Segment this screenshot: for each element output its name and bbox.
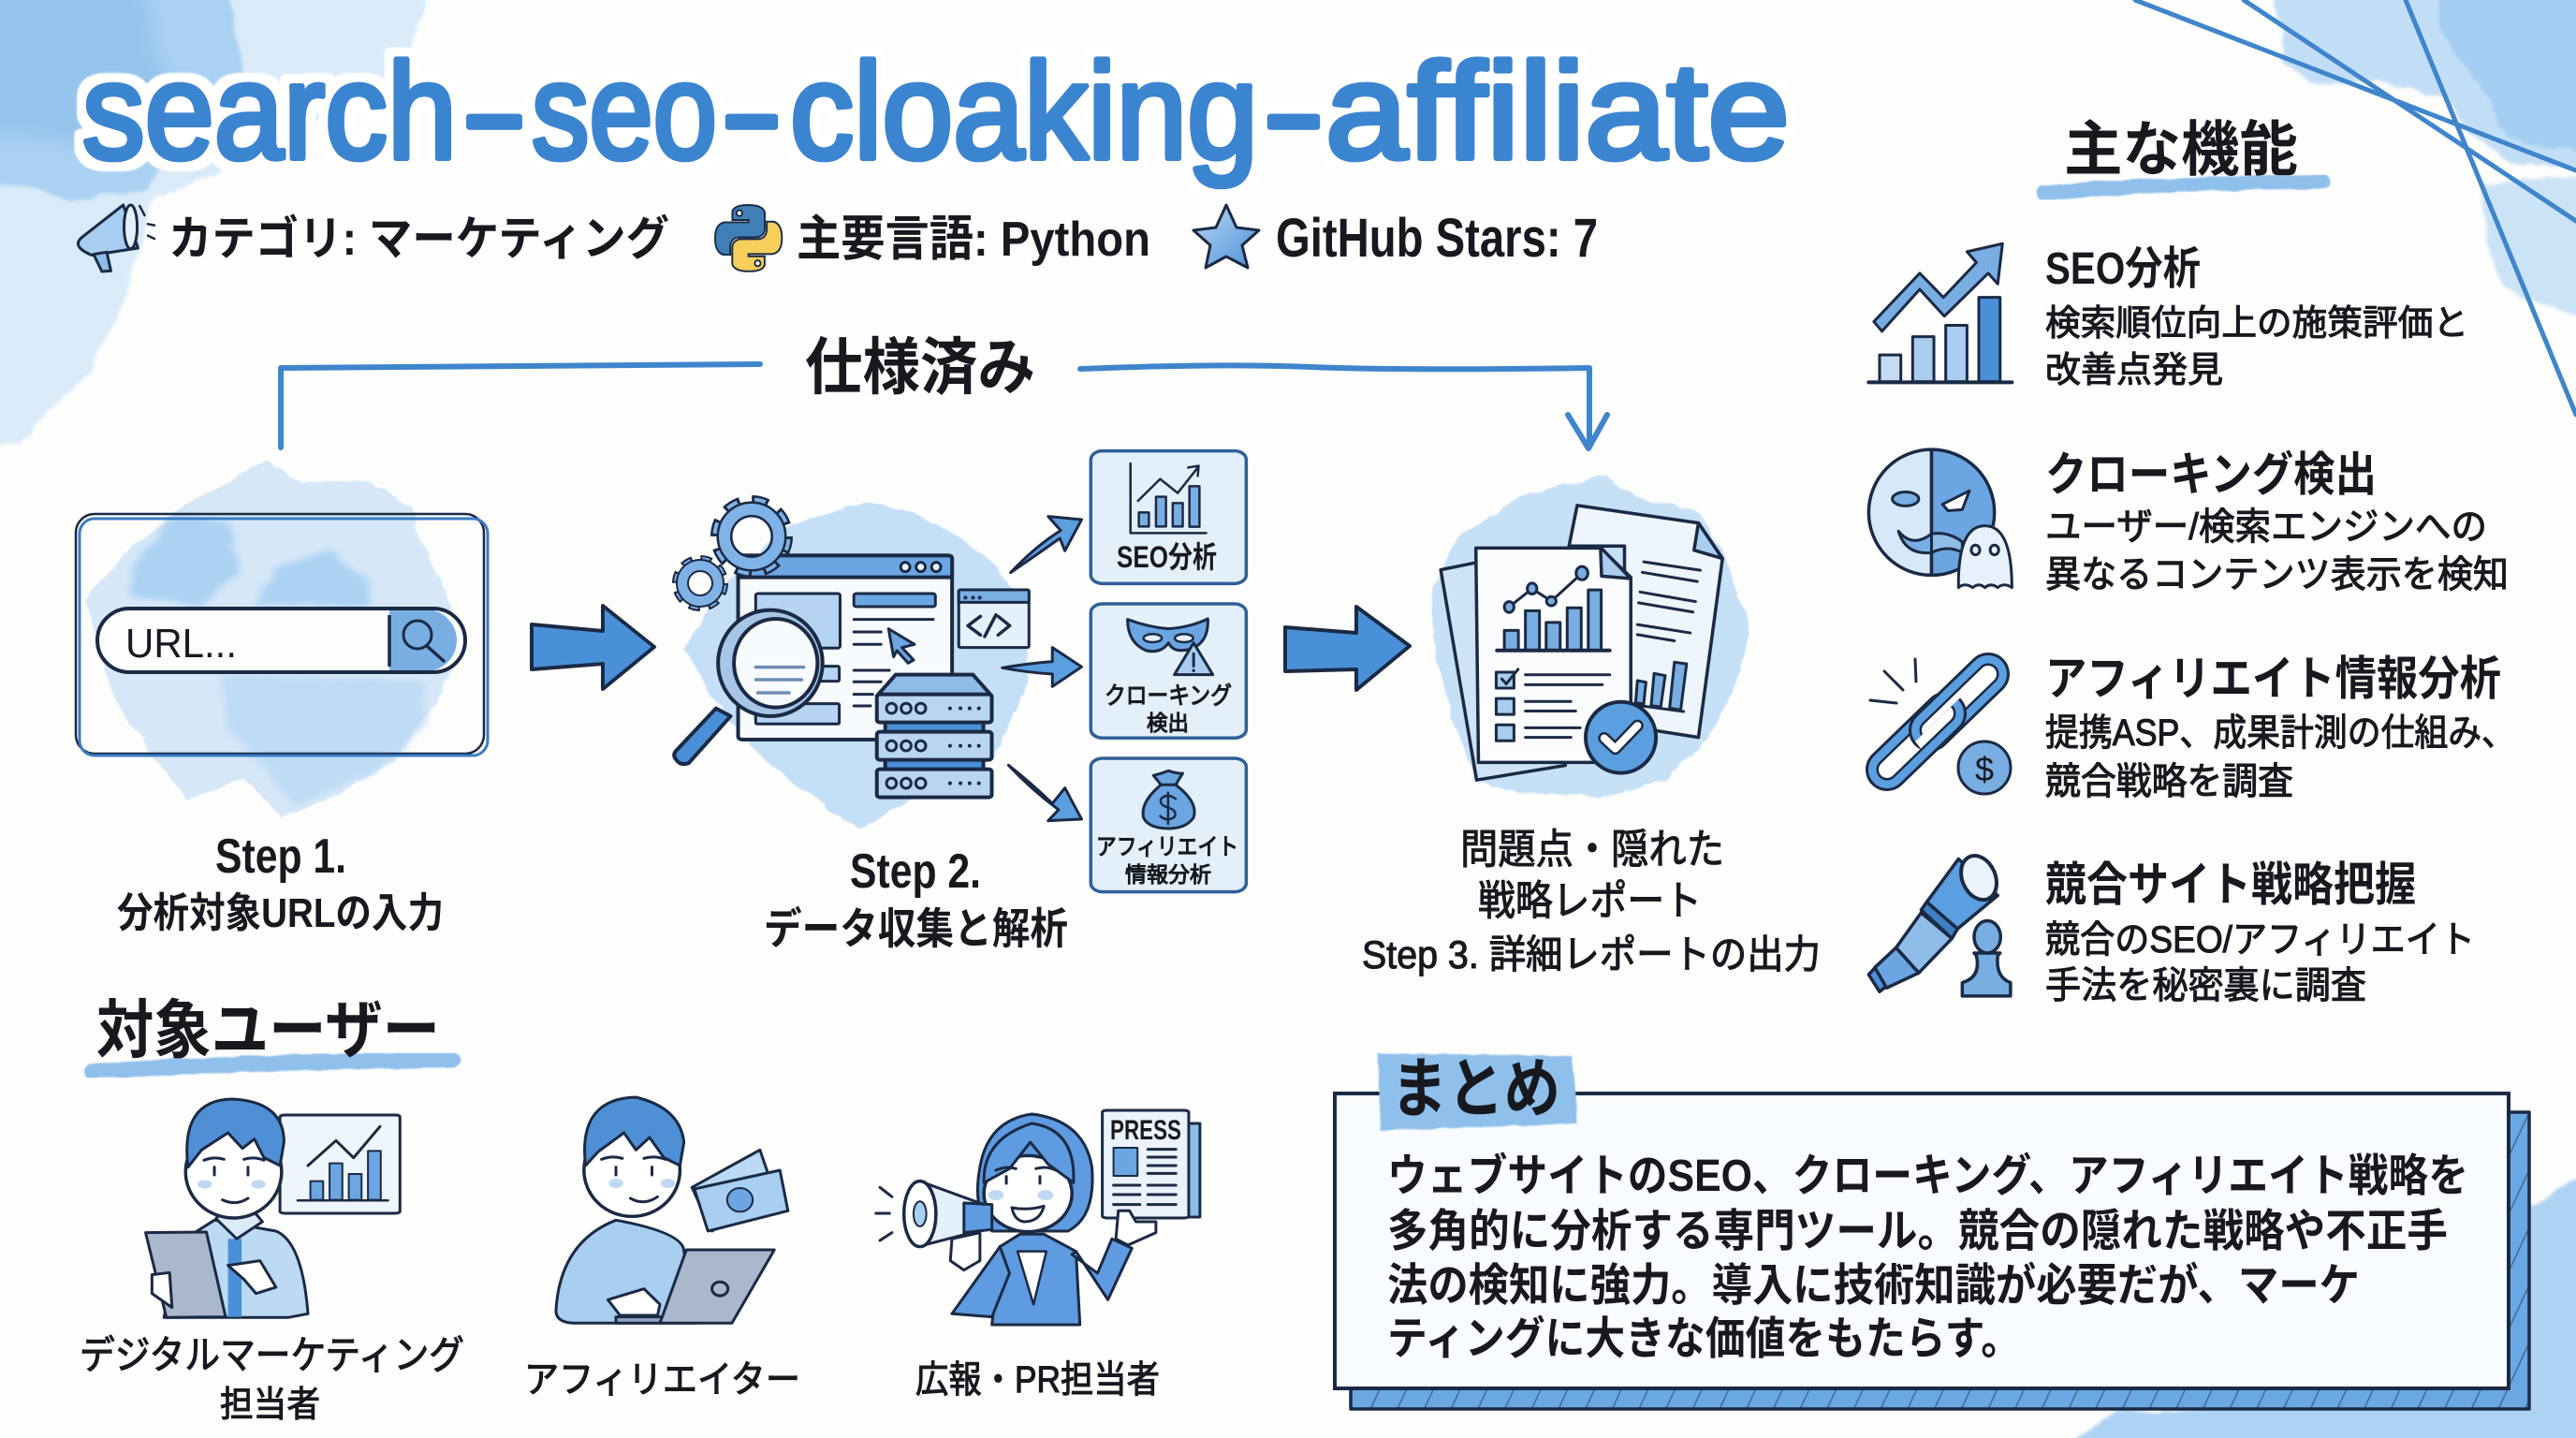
summary text: ウェブサイトのSEO、クローキング、アフィリエイト戦略を [1387, 1152, 2468, 1201]
step 1: URL input [76, 460, 488, 936]
box shadow [1351, 1112, 2529, 1409]
feature: SEO analysis: 検索順位向上の施策評価と [2045, 304, 2468, 344]
mini money bag [1143, 770, 1194, 829]
watercolor top-left [0, 0, 440, 459]
magnifier [674, 709, 731, 764]
title: - [461, 35, 527, 187]
panel: target users [80, 995, 1200, 1425]
person labels: 担当者 [220, 1386, 320, 1425]
feature: SEO analysis [1868, 243, 2468, 390]
feature: affiliate analysis: $ [1975, 750, 1994, 788]
feature: affiliate analysis: アフィリエイト情報分析 [2045, 653, 2501, 705]
title: cloaking [790, 35, 1258, 187]
step 1 caption: Step 1. [215, 829, 346, 884]
watercolor top-right [2265, 0, 2576, 318]
title: - [721, 35, 783, 187]
title: affiliate [1325, 35, 1790, 187]
feature: competitor strategy: 手法を秘密裏に調査 [2045, 965, 2366, 1006]
person: affiliate [556, 1097, 788, 1323]
feature: cloaking detection: ユーザー/検索エンジンへの [2045, 506, 2487, 548]
summary text [1387, 1152, 2468, 1364]
card labels: アフィリエイト [1096, 834, 1238, 860]
meta row: category, language, stars [78, 205, 1598, 271]
card labels: SEO分析 [1117, 540, 1217, 574]
feature: cloaking detection: クローキング検出 [2045, 448, 2377, 501]
browser window [739, 555, 952, 740]
card labels: 検出 [1147, 711, 1189, 735]
card labels [1096, 540, 1238, 887]
icon: star [1193, 205, 1259, 268]
watercolor blob [84, 460, 461, 817]
text: category: カテゴリ: マーケティング [168, 213, 669, 265]
step 3: report output [1362, 475, 1821, 976]
title: seo [532, 35, 717, 187]
step 3 caption: Step 3. 詳細レポートの出力 [1362, 932, 1821, 976]
card labels: クローキング [1105, 682, 1232, 710]
step 2 caption: Step 2. [850, 844, 981, 899]
search bar: URL... [125, 621, 237, 667]
feature: SEO analysis: SEO分析 [2045, 244, 2201, 294]
report illustration [1432, 475, 1750, 797]
panel: main features [1868, 116, 2515, 1006]
gears [680, 506, 783, 604]
feature: cloaking detection: 異なるコンテンツ表示を検知 [2045, 554, 2509, 595]
person labels: デジタルマーケティング [80, 1333, 464, 1377]
panel: summary [1335, 1052, 2529, 1409]
person labels: アフィリエイター [524, 1359, 800, 1401]
mini chart [1131, 463, 1207, 533]
mini mask [1128, 619, 1208, 652]
feature: competitor strategy: 競合サイト戦略把握 [2045, 858, 2416, 911]
arrow: step 2 to step 3 [1285, 607, 1410, 690]
summary text: ティングに大きな価値をもたらす。 [1387, 1314, 2021, 1364]
step 2 caption: データ収集と解析 [764, 904, 1068, 953]
illustration [674, 451, 1246, 892]
heading: 仕様済み with bracket arrow: 仕様済み [805, 332, 1035, 402]
feature: SEO analysis: 改善点発見 [2045, 351, 2223, 390]
result cards [1090, 451, 1246, 892]
title: search [82, 35, 457, 187]
step 1 caption [117, 829, 444, 936]
heading: target users: 対象ユーザー [96, 995, 440, 1066]
heading: 仕様済み with bracket arrow [281, 332, 1607, 448]
person labels: 広報・PR担当者 [915, 1359, 1160, 1401]
icon: megaphone [78, 205, 154, 271]
server stack [877, 675, 992, 696]
branching arrows [1003, 517, 1082, 821]
summary text: 法の検知に強力。導入に技術知識が必要だが、マーケ [1387, 1261, 2360, 1311]
person labels [80, 1333, 1160, 1425]
box body [1335, 1093, 2509, 1388]
watercolor bottom-right [2012, 1161, 2576, 1438]
person: PR manager: PRESS [1110, 1115, 1181, 1146]
step 3 caption: 問題点・隠れた [1460, 827, 1724, 873]
feature: cloaking detection [1868, 448, 2509, 595]
input frame [76, 514, 488, 756]
step 2 caption [764, 844, 1068, 953]
step 2: data collection [674, 451, 1246, 953]
search bar [97, 609, 465, 672]
feature: competitor strategy [1868, 848, 2475, 1006]
title: - [1263, 35, 1325, 187]
feature: affiliate analysis: 提携ASP、成果計測の仕組み、 [2045, 712, 2515, 754]
card labels: 情報分析 [1125, 862, 1211, 887]
step 1 caption: 分析対象URLの入力 [117, 890, 444, 936]
feature: competitor strategy: 競合のSEO/アフィリエイト [2045, 919, 2475, 961]
step 3 caption [1362, 827, 1821, 976]
arrow: step 1 to step 2 [532, 606, 654, 689]
code window [959, 590, 1029, 648]
text: language: 主要言語: Python [797, 213, 1150, 267]
feature: affiliate analysis: 競合戦略を調査 [2045, 761, 2293, 802]
person: digital marketer [146, 1099, 400, 1317]
heading: main features: 主な機能 [2064, 116, 2298, 183]
step 3 caption: 戦略レポート [1478, 878, 1702, 924]
text: stars: GitHub Stars: 7 [1276, 208, 1598, 269]
person: PR manager [876, 1110, 1200, 1325]
feature: affiliate analysis [1870, 653, 2515, 802]
corner lines [2135, 0, 2576, 415]
summary text: 多角的に分析する専門ツール。競合の隠れた戦略や不正手 [1387, 1207, 2448, 1256]
title [82, 35, 1790, 187]
icon: python logo [715, 205, 782, 271]
tag: summary: まとめ [1391, 1052, 1560, 1125]
